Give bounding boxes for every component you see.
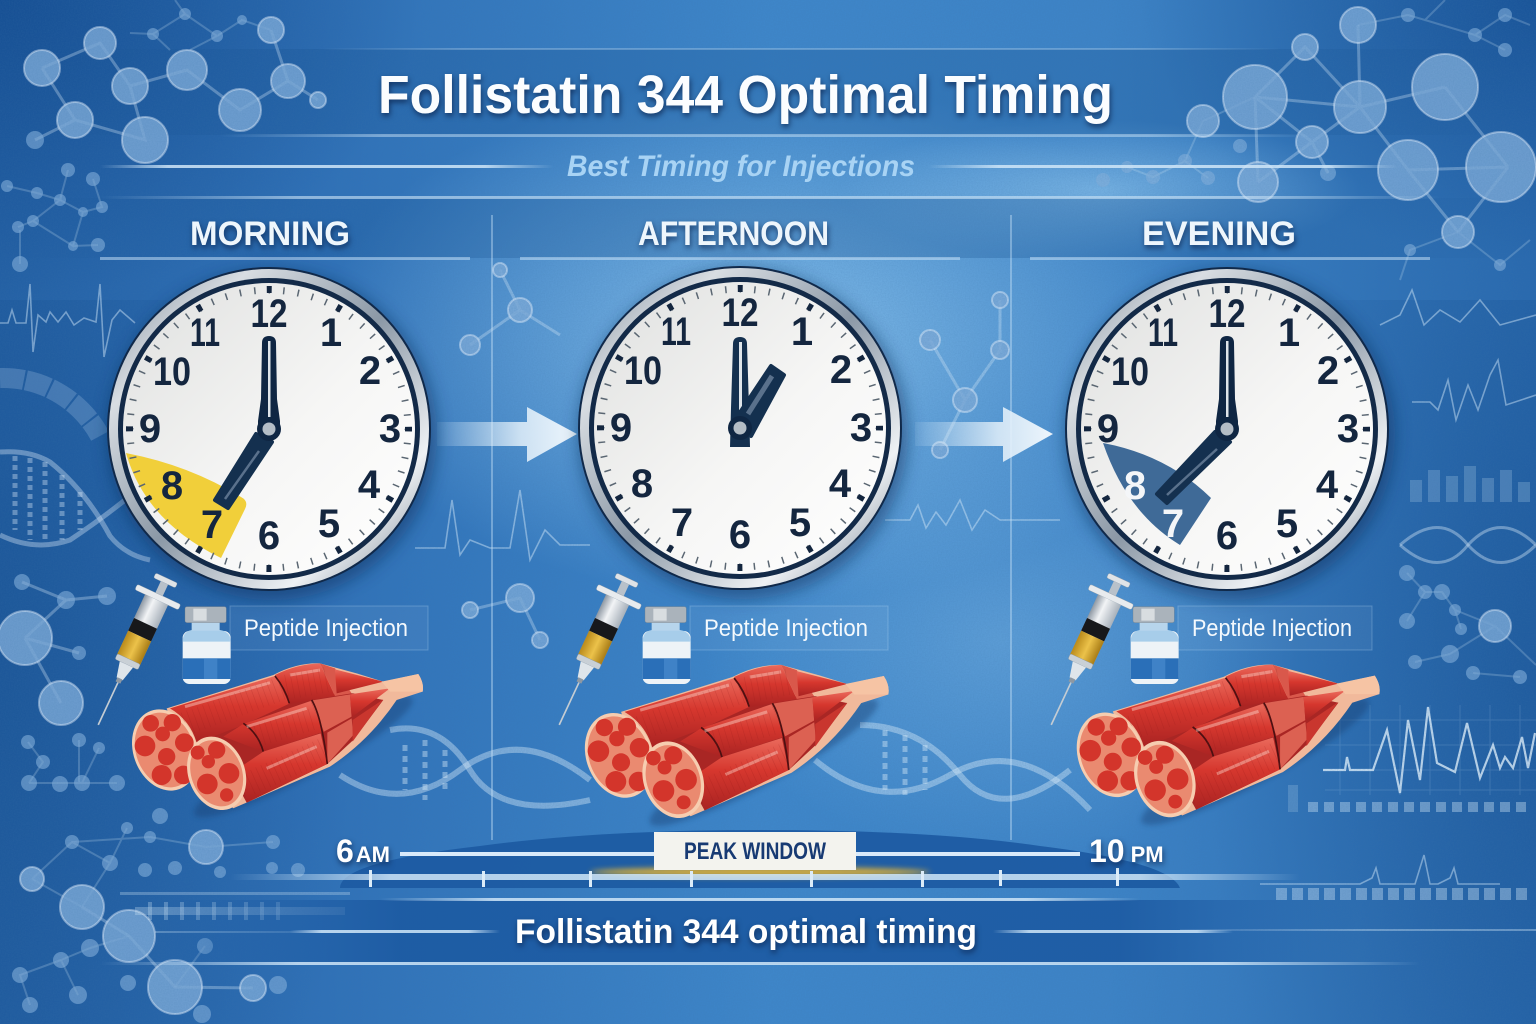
clock: afternoon: 11	[661, 310, 691, 354]
muscle: afternoon	[573, 665, 889, 842]
clock: afternoon: 10	[624, 349, 662, 393]
label: morning injection	[230, 606, 428, 650]
clock: morning: 4	[358, 463, 381, 507]
hands: morning	[215, 336, 281, 508]
clock: morning: 10	[153, 350, 191, 394]
vial: afternoon	[643, 607, 691, 684]
clock: evening: 10	[1111, 350, 1149, 394]
molecule network: bottom left	[12, 885, 287, 1023]
heading: afternoon: AFTERNOON	[638, 215, 829, 253]
data squares: lower right	[1180, 785, 1536, 931]
clock: morning: 9	[139, 407, 161, 451]
horizontal data strips: lower left	[120, 892, 355, 933]
clock: morning: 2	[359, 349, 381, 393]
DNA helix: under morning muscle	[340, 728, 590, 806]
molecule network: top left	[24, 0, 326, 163]
subtitle: Best Timing for Injections	[567, 150, 915, 183]
ECG traces	[0, 284, 1536, 560]
muscle: morning	[121, 663, 423, 833]
clock: morning: 1	[320, 311, 342, 355]
vial: morning	[183, 607, 231, 684]
molecule network: lower left	[0, 574, 305, 907]
label: afternoon injection	[690, 606, 888, 650]
title: Follistatin 344 Optimal Timing	[378, 65, 1113, 125]
clock: evening: 12	[1208, 292, 1246, 336]
molecule network: top right	[1096, 0, 1536, 280]
timeline	[230, 830, 1300, 888]
hands: afternoon	[728, 337, 784, 447]
peak window box: PEAK WINDOW	[684, 838, 826, 865]
molecule network: right middle	[1399, 565, 1536, 684]
clock: afternoon: 2	[830, 348, 852, 392]
clock: evening: 6	[1216, 514, 1238, 558]
heading: evening: EVENING	[1142, 215, 1296, 253]
clock: evening: 4	[1316, 463, 1339, 507]
clock: evening: 5	[1276, 502, 1298, 546]
footer band	[100, 898, 1420, 965]
heading: morning: MORNING	[190, 215, 350, 253]
clock: afternoon: 7	[671, 501, 693, 545]
arrow: afternoon to evening	[915, 407, 1053, 462]
clock: evening	[1065, 267, 1395, 600]
clock: morning	[107, 267, 437, 600]
injection group: afternoon	[537, 568, 889, 842]
label: 6 AM: 6AM	[336, 833, 390, 869]
label: afternoon injection: Peptide Injection	[704, 615, 868, 642]
clock: afternoon: 8	[631, 462, 653, 506]
highlight sector: morning	[126, 453, 246, 558]
timeline ticks	[369, 868, 1119, 887]
clock: morning: 8	[161, 464, 183, 508]
clock: afternoon	[578, 266, 908, 599]
clock: evening: 1	[1278, 311, 1300, 355]
label: evening injection	[1178, 606, 1372, 650]
ECG chart: lower right	[1323, 705, 1536, 795]
clock: morning: 12	[250, 292, 288, 336]
muscle: evening	[1065, 665, 1380, 841]
footer caption: Follistatin 344 optimal timing	[515, 913, 977, 951]
arrow: morning to afternoon	[437, 407, 577, 462]
syringe: afternoon	[537, 568, 649, 735]
highlight sector: evening	[1103, 443, 1211, 545]
label: evening injection: Peptide Injection	[1192, 615, 1352, 642]
small ECG: lower right	[1260, 855, 1500, 884]
clock: afternoon: 5	[789, 501, 811, 545]
clock: evening: 8	[1124, 464, 1146, 508]
clock: afternoon: 12	[722, 291, 758, 335]
DNA wave: right	[1400, 528, 1536, 562]
DNA helix: under afternoon muscle	[815, 725, 1090, 810]
clock: morning: 5	[318, 502, 340, 546]
clock: afternoon: 9	[610, 406, 632, 450]
clock: afternoon: 4	[829, 462, 852, 506]
clock: evening: 3	[1337, 407, 1359, 451]
label: morning injection: Peptide Injection	[244, 615, 408, 642]
arc graphic: left	[0, 378, 100, 436]
molecule network: left middle	[1, 163, 108, 272]
molecule network: behind afternoon clock	[460, 263, 1009, 648]
clock: afternoon: 1	[791, 310, 813, 354]
clock: morning: 7	[201, 503, 223, 547]
injection group: evening	[1029, 568, 1380, 841]
peak window box	[654, 832, 856, 870]
clock: evening: 11	[1148, 311, 1178, 355]
DNA helix: left	[0, 452, 150, 560]
vial: evening	[1131, 607, 1179, 684]
clock: evening: 2	[1317, 349, 1339, 393]
section dividers	[100, 48, 1440, 840]
injection group: morning	[76, 568, 428, 833]
clock: morning: 11	[190, 311, 220, 355]
hands: evening	[1157, 336, 1239, 503]
clock: morning: 6	[258, 514, 280, 558]
data bars: right side	[1410, 466, 1530, 502]
clock: morning: 3	[379, 407, 401, 451]
clock: afternoon: 3	[850, 406, 872, 450]
clock: evening: 7	[1162, 502, 1184, 546]
subtitle	[100, 150, 1398, 183]
syringe: evening	[1029, 568, 1141, 735]
clock: afternoon: 6	[729, 513, 751, 557]
clock: evening: 9	[1097, 407, 1119, 451]
label: 10 PM: 10 PM	[1089, 833, 1164, 869]
syringe: morning	[76, 568, 188, 735]
